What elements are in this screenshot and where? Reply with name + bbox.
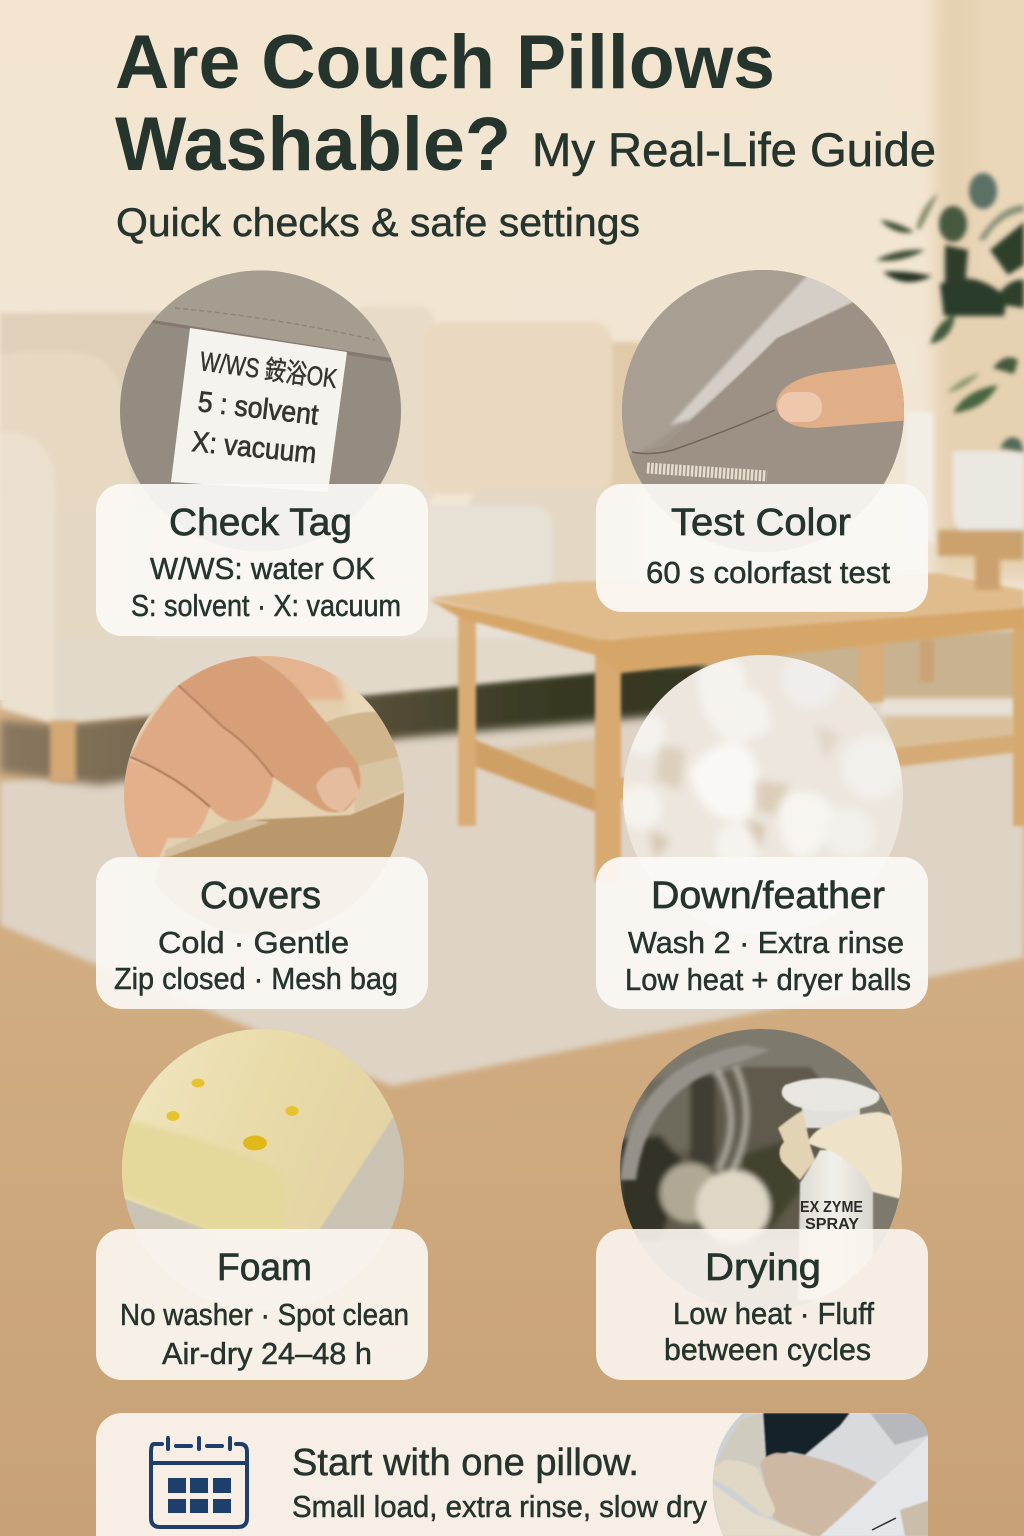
side table and pots bbox=[905, 412, 1024, 590]
card: drying bbox=[596, 1229, 928, 1380]
card: down and feather: Wash 2 · Extra rinse bbox=[628, 925, 904, 960]
card: foam bbox=[96, 1229, 428, 1380]
panel: check tag bbox=[96, 265, 428, 636]
title bbox=[115, 20, 936, 187]
photo: care tag: W/WS 銨浴OK bbox=[198, 346, 339, 394]
banner text: Small load, extra rinse, slow dry bbox=[292, 1489, 707, 1524]
banner text bbox=[292, 1442, 707, 1524]
photo: hand opening zipper bbox=[124, 656, 404, 857]
card: down and feather: Low heat + dryer balls bbox=[625, 962, 911, 997]
card: foam: Air-dry 24–48 h bbox=[162, 1336, 372, 1371]
panel: test color bbox=[596, 265, 928, 612]
banner: start with one pillow bbox=[96, 1413, 930, 1536]
card: down and feather bbox=[596, 857, 928, 1009]
subtitle: Quick checks & safe settings bbox=[116, 201, 640, 245]
back floor bbox=[640, 630, 1024, 710]
photo: dryer drum and enzyme spray: SPRAY bbox=[805, 1216, 860, 1233]
card: check tag bbox=[96, 484, 428, 636]
card: check tag: Check Tag bbox=[169, 502, 352, 544]
card: drying: Drying bbox=[705, 1247, 821, 1289]
banner text: Start with one pillow. bbox=[292, 1442, 639, 1484]
curtain bbox=[935, 0, 1024, 580]
shadow under sofa bbox=[0, 664, 705, 785]
title: Are Couch Pillows bbox=[115, 20, 775, 105]
photo: foam block bbox=[122, 1029, 404, 1229]
card: drying: between cycles bbox=[664, 1332, 871, 1367]
panel: covers bbox=[96, 650, 428, 1009]
card: foam: Foam bbox=[217, 1247, 312, 1289]
sofa bbox=[0, 306, 652, 782]
card: test color bbox=[596, 484, 928, 612]
card: foam: No washer · Spot clean bbox=[120, 1297, 409, 1332]
card: down and feather: Down/feather bbox=[651, 875, 885, 917]
coffee table bbox=[430, 573, 1024, 882]
photo: white down fluff bbox=[623, 655, 903, 857]
panel: drying bbox=[596, 1025, 928, 1380]
card: check tag: W/WS: water OK bbox=[150, 551, 375, 586]
photo: care tag: 5 : solvent bbox=[196, 386, 320, 432]
card: covers: Zip closed · Mesh bag bbox=[114, 961, 398, 996]
photo: care tag bbox=[120, 270, 401, 484]
rug bbox=[0, 700, 1024, 1086]
photo: fabric and finger bbox=[622, 270, 904, 484]
card: drying: Low heat · Fluff bbox=[673, 1296, 874, 1331]
card: covers: Cold · Gentle bbox=[158, 925, 349, 960]
card: check tag: S: solvent · X: vacuum bbox=[131, 588, 401, 623]
title: Washable? bbox=[115, 102, 511, 187]
card: covers bbox=[96, 857, 428, 1009]
panel: down and feather bbox=[596, 650, 928, 1009]
icon: calendar bbox=[151, 1438, 247, 1527]
card: test color: Test Color bbox=[671, 502, 851, 544]
plant bbox=[876, 173, 1024, 452]
photo: dryer drum and enzyme spray bbox=[620, 1029, 902, 1299]
under-table tones bbox=[476, 699, 1024, 802]
photo: care tag: X: vacuum bbox=[190, 426, 318, 470]
card: test color: 60 s colorfast test bbox=[646, 555, 890, 590]
title: My Real-Life Guide bbox=[532, 123, 936, 176]
panel: foam bbox=[96, 1025, 428, 1380]
photo: dryer drum and enzyme spray: EX ZYME bbox=[800, 1199, 863, 1216]
photo: gloved hands holding pillow bbox=[705, 1413, 930, 1536]
card: covers: Covers bbox=[200, 875, 321, 917]
